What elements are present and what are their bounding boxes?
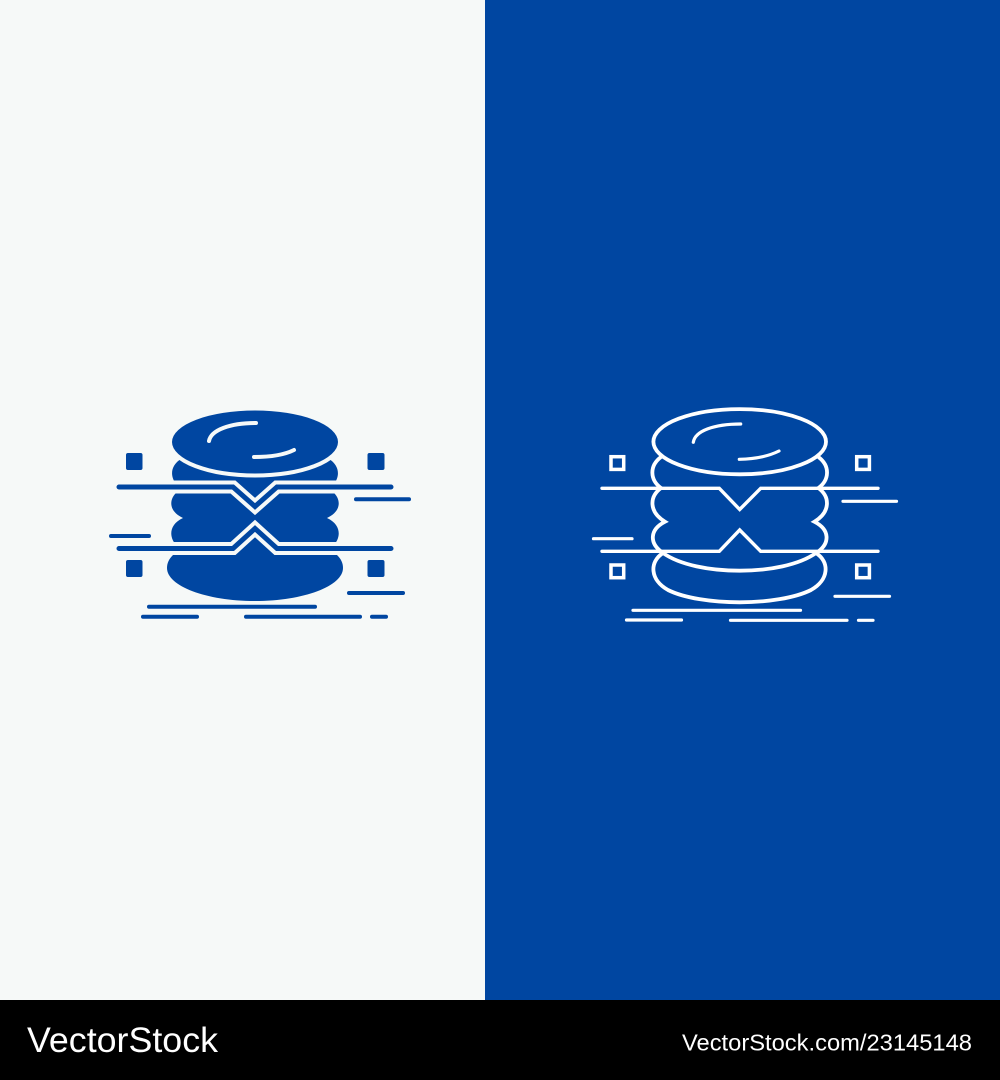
icon: outline database [594, 409, 896, 620]
upper connector line [110, 487, 400, 506]
disk highlights [693, 424, 741, 442]
disk highlights [209, 423, 294, 457]
upper connector line [602, 488, 878, 510]
panel: light left panel [0, 0, 485, 1000]
footer brand wordmark: VectorStock [27, 1021, 219, 1060]
icon: solid glyph database [110, 410, 409, 617]
lower connector line [602, 530, 878, 551]
bottom disk upper arc [663, 553, 816, 571]
footer image id: VectorStock.com/23145148 [682, 1030, 972, 1056]
speed lines [594, 501, 896, 620]
bottom disk outline [653, 553, 826, 602]
stack silhouette [167, 459, 343, 601]
left stack edge [652, 457, 665, 552]
speed lines [111, 499, 409, 617]
second disk highlight [739, 451, 779, 459]
lower connector line [110, 528, 400, 548]
footer bar [0, 1000, 1000, 1080]
right stack edge [814, 457, 827, 552]
corner squares [126, 453, 384, 577]
panel: blue right panel [485, 0, 1000, 1000]
top disk outline [653, 409, 826, 474]
corner squares [611, 457, 869, 578]
top disk [172, 410, 338, 474]
